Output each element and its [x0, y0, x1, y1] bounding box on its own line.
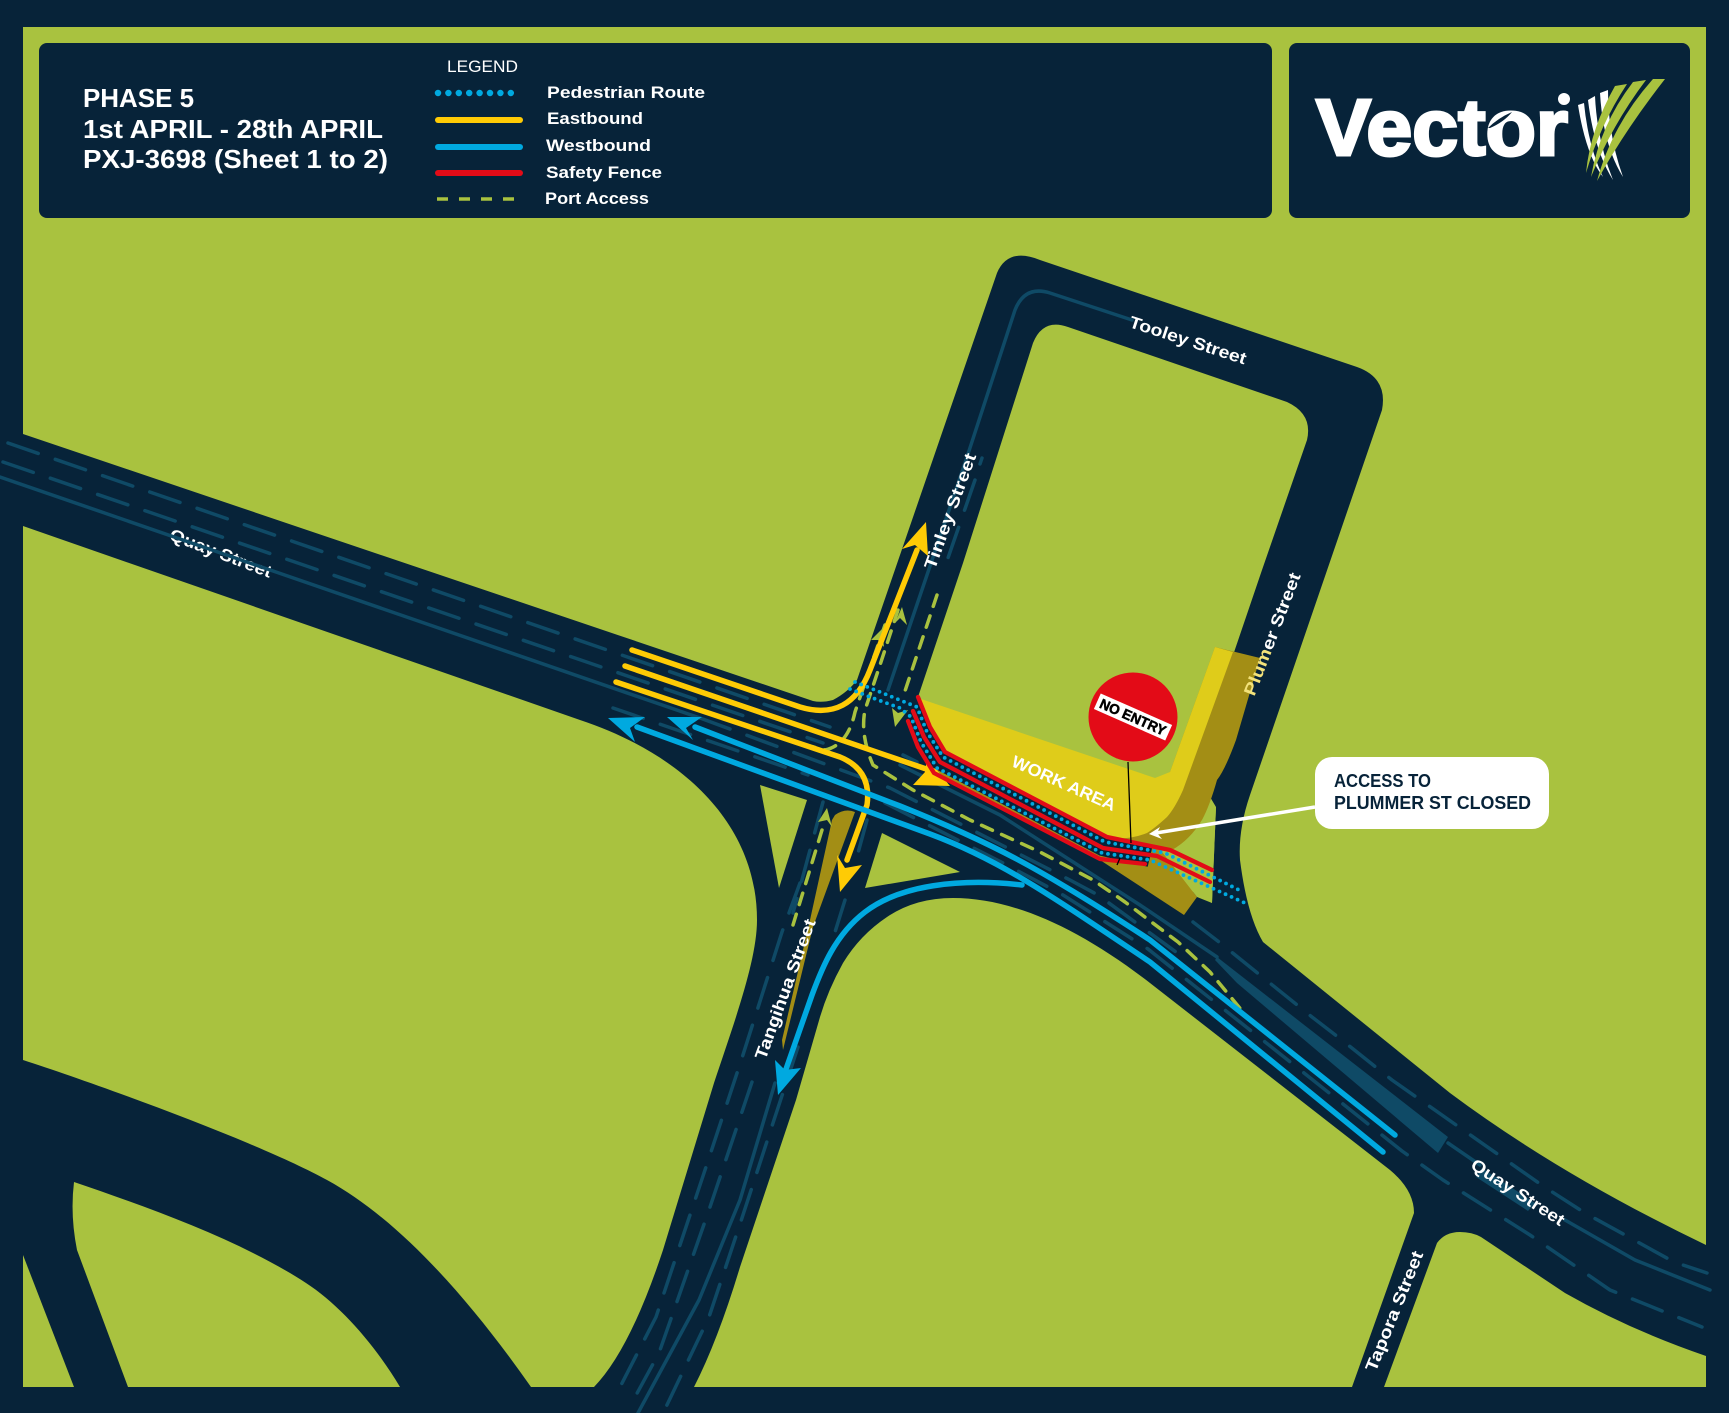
no entry sign: [1088, 672, 1178, 865]
phase title: PHASE 5: [83, 83, 194, 113]
header panel: Vector logo: [1289, 43, 1690, 218]
work area zone: [909, 647, 1260, 915]
phase title: 1st APRIL - 28th APRIL: [83, 114, 383, 144]
tangihua closure shading: [782, 811, 855, 1050]
street label: Tooley Street: Tooley Street: [1127, 313, 1249, 368]
port access routes: [793, 595, 1248, 1018]
legend: pedestrian route: Pedestrian Route: [547, 83, 705, 102]
callout: access to Plummer St closed: [1149, 757, 1549, 839]
work area yellow block: [918, 647, 1233, 838]
street label: Quay Street west: Quay Street: [167, 525, 275, 582]
port access arrowheads: [818, 607, 908, 827]
no entry sign: NO ENTRY: [1097, 695, 1169, 739]
closure shading below fence: [909, 725, 1197, 915]
street label: Tinley Street: Tinley Street: [921, 450, 980, 572]
legend: eastbound: Eastbound: [547, 109, 643, 128]
westbound arrowheads: [608, 717, 801, 1095]
phase title: PXJ-3698 (Sheet 1 to 2): [83, 144, 388, 174]
road lane markings: [0, 291, 1710, 1413]
street label: Quay Street east: Quay Street: [1467, 1155, 1569, 1230]
work area label: WORK AREA: [1009, 752, 1119, 815]
header panel: phase and legend: [39, 43, 1272, 218]
sign pole: [1117, 762, 1131, 865]
eastbound arrowheads: [837, 522, 950, 892]
closure shading on Plumer Street: [1120, 647, 1260, 852]
logo swoosh: [1578, 79, 1665, 181]
street label: Plumer Street: Plumer Street: [1240, 570, 1305, 698]
legend: port access: Port Access: [545, 189, 649, 208]
safety fence red: [908, 697, 1212, 882]
closed green corner: [1163, 807, 1216, 903]
westbound route blue: [608, 717, 1395, 1152]
street label: Tapora Street: Tapora Street: [1362, 1248, 1427, 1374]
legend heading: LEGEND: [447, 57, 518, 76]
legend: westbound: Westbound: [546, 136, 651, 155]
pedestrian route dotted: [850, 682, 1245, 903]
callout: access to Plummer St closed: PLUMMER ST CLOSED: [1334, 793, 1531, 813]
callout: access to Plummer St closed: ACCESS TO: [1334, 771, 1431, 791]
phase title: [83, 83, 388, 174]
eastbound route yellow: [616, 522, 950, 892]
legend: safety fence: Safety Fence: [546, 163, 662, 182]
logo wordmark: Vector: [1316, 83, 1568, 172]
street label: Tangihua Street: Tangihua Street: [751, 916, 820, 1062]
